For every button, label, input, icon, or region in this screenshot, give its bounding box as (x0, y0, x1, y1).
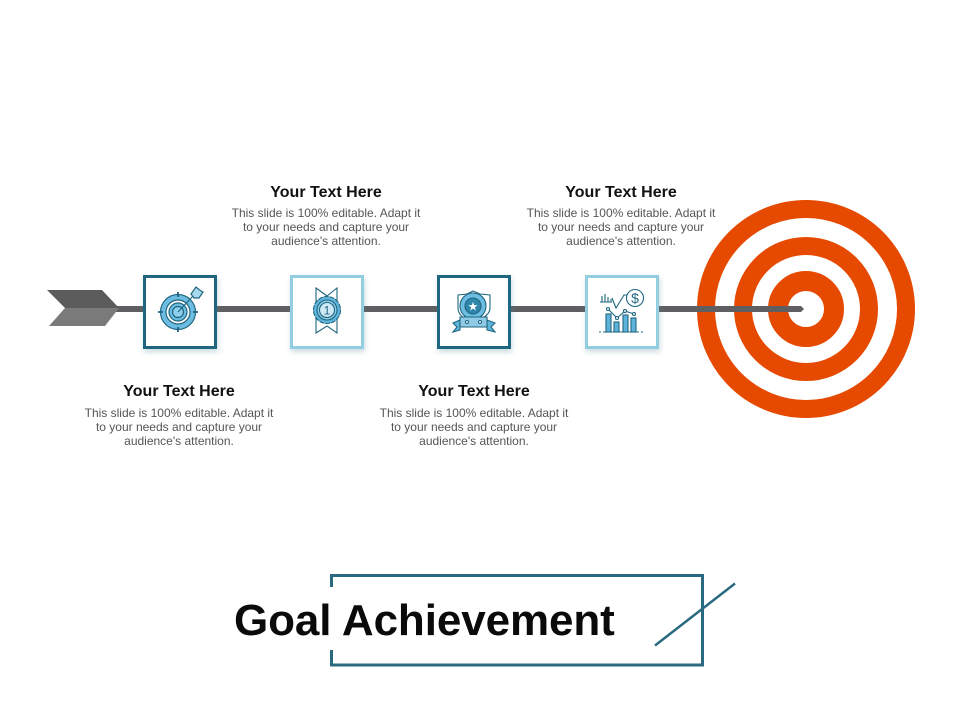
text block: bottom middle: to your needs and capture your (391, 420, 557, 434)
icon box 3: badge shield (437, 275, 511, 349)
text block: top right: audience's attention. (566, 234, 676, 248)
icon box 2: medal ribbon (290, 275, 364, 349)
title frame (330, 574, 736, 666)
text block: bottom left: audience's attention. (124, 434, 234, 448)
icon box 1: target (143, 275, 217, 349)
text block: top left: to your needs and capture your (243, 220, 409, 234)
title: Goal Achievement (234, 596, 615, 645)
text block: top left (232, 184, 420, 248)
text block: bottom middle: Your Text Here (418, 383, 530, 400)
icon: shield badge: ★ (468, 300, 478, 314)
text block: bottom left: Your Text Here (123, 383, 235, 400)
text block: bottom left: to your needs and capture your (96, 420, 262, 434)
text block: bottom middle (380, 383, 568, 448)
text block: top left: This slide is 100% editable. Adapt it (232, 206, 420, 220)
text block: top left: Your Text Here (270, 184, 382, 201)
text block: bottom middle: This slide is 100% editable. Adapt it (380, 406, 568, 420)
text block: top right: Your Text Here (565, 184, 677, 201)
text block: top right: to your needs and capture your (538, 220, 704, 234)
icon box 4: finance chart (585, 275, 659, 349)
arrow fletching (47, 290, 119, 326)
bullseye target (706, 209, 906, 409)
icon: medal: 1 (324, 304, 331, 318)
text block: bottom left (84, 383, 274, 448)
arrow shaft (115, 306, 804, 312)
text block: top left: audience's attention. (271, 234, 381, 248)
icon: bar chart with dollar: $ (631, 290, 639, 306)
text block: bottom left: This slide is 100% editable. Adapt it (85, 406, 273, 420)
text block: top right: This slide is 100% editable. Adapt it (527, 206, 715, 220)
icon: target with dart (158, 287, 203, 332)
text block: bottom middle: audience's attention. (419, 434, 529, 448)
text block: top right (526, 184, 716, 248)
